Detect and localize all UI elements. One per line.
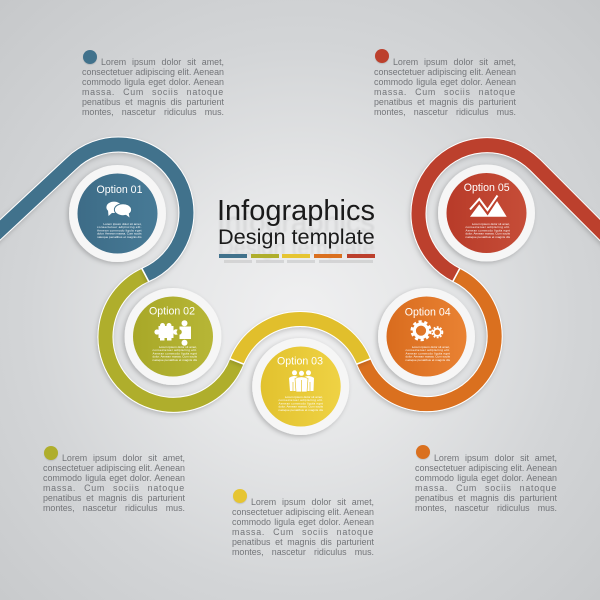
body text: dolor. Aenean massa. Cum sociis bbox=[466, 232, 510, 236]
body text: Aenean commodo ligula eget bbox=[97, 228, 142, 232]
text block: top right: massa. Cum sociis natoque bbox=[374, 87, 516, 97]
title block bbox=[217, 195, 375, 263]
colour key bars bbox=[219, 254, 375, 263]
track segment 1: blue bbox=[0, 145, 186, 275]
text block: top left: commodo ligula eget dolor. Aenean bbox=[82, 77, 224, 87]
text block: top right bbox=[374, 49, 516, 117]
text block: bottom left: montes, nascetur ridiculus mus. bbox=[43, 503, 185, 513]
text block: bottom centre: penatibus et magnis dis parturient bbox=[232, 537, 374, 547]
body text bbox=[466, 222, 510, 239]
icon: speech bubbles bbox=[106, 202, 132, 218]
text block: bottom left: consectetuer adipiscing elit. Aenean bbox=[43, 463, 185, 473]
body text: consectetuer adipiscing elit. bbox=[278, 398, 323, 402]
icon: people bbox=[289, 370, 314, 392]
body text: dolor. Aenean massa. Cum sociis bbox=[152, 355, 197, 359]
text block: bottom left: commodo ligula eget dolor. Aenean bbox=[43, 473, 185, 483]
text block: top left: penatibus et magnis dis parturient bbox=[82, 97, 224, 107]
body text: Lorem ipsum dolor sit amet, bbox=[159, 345, 197, 349]
title block: Infographics bbox=[217, 207, 375, 239]
body text: Aenean commodo ligula eget bbox=[278, 401, 323, 405]
body text: consectetuer adipiscing elit. bbox=[466, 225, 510, 229]
body text: consectetuer adipiscing elit. bbox=[406, 348, 450, 352]
text block: bottom right: massa. Cum sociis natoque bbox=[415, 483, 557, 493]
track segment 4: orange bbox=[364, 275, 495, 404]
text block: bottom right: commodo ligula eget dolor. Aenean bbox=[415, 473, 557, 483]
body text: dolor. Aenean massa. Cum sociis bbox=[97, 232, 142, 236]
body text: consectetuer adipiscing elit. bbox=[97, 225, 142, 229]
body text bbox=[97, 222, 142, 239]
body text: consectetuer adipiscing elit. bbox=[152, 348, 197, 352]
body text: natoque penatibus et magnis dis bbox=[466, 235, 510, 239]
text block: top right: montes, nascetur ridiculus mus. bbox=[374, 107, 516, 117]
text block: bottom centre: consectetuer adipiscing elit. Aenean bbox=[232, 507, 374, 517]
text block: bottom right bbox=[415, 445, 557, 513]
title: Infographics bbox=[217, 195, 375, 227]
body text: Aenean commodo ligula eget bbox=[152, 351, 197, 355]
text block: top right: consectetuer adipiscing elit. Aenean bbox=[374, 67, 516, 77]
text block: bottom right: montes, nascetur ridiculus mus. bbox=[415, 503, 557, 513]
text block: bottom centre: massa. Cum sociis natoque bbox=[232, 527, 374, 537]
text block: bottom left: penatibus et magnis dis parturient bbox=[43, 493, 185, 503]
text block: top right: commodo ligula eget dolor. Aenean bbox=[374, 77, 516, 87]
option 03 bbox=[252, 338, 349, 435]
text block: top left: Lorem ipsum dolor sit amet, bbox=[101, 57, 224, 67]
text block: top right: Lorem ipsum dolor sit amet, bbox=[393, 56, 516, 66]
body text: natoque penatibus et magnis dis bbox=[97, 235, 142, 239]
icon: mountain chart bbox=[470, 196, 507, 217]
text block: top left: consectetuer adipiscing elit. Aenean bbox=[82, 67, 224, 77]
option 03: Option 03 bbox=[277, 356, 323, 368]
option 05: Option 05 bbox=[464, 182, 510, 194]
text block: top right: penatibus et magnis dis parturient bbox=[374, 97, 516, 107]
body text: natoque penatibus et magnis dis bbox=[406, 358, 450, 362]
text block: bottom right: Lorem ipsum dolor sit amet, bbox=[434, 452, 557, 462]
option 04 bbox=[378, 288, 475, 385]
body text bbox=[406, 345, 450, 362]
text block: bottom centre: montes, nascetur ridiculus mus. bbox=[232, 547, 374, 557]
option 02 bbox=[124, 288, 222, 385]
option 04: Option 04 bbox=[405, 306, 451, 318]
track segment 5: red bbox=[418, 145, 600, 275]
body text: Aenean commodo ligula eget bbox=[466, 228, 510, 232]
ribbon track bbox=[0, 145, 600, 405]
body text bbox=[278, 395, 323, 412]
text block: bottom left bbox=[43, 446, 185, 513]
option 01: Option 01 bbox=[97, 184, 143, 196]
track segment 2: olive bbox=[105, 275, 237, 405]
option 02: Option 02 bbox=[149, 306, 195, 318]
icon: puzzle bbox=[154, 320, 191, 346]
text block: bottom left: Lorem ipsum dolor sit amet, bbox=[62, 453, 185, 463]
body text: Lorem ipsum dolor sit amet, bbox=[412, 345, 450, 349]
icon: gears bbox=[412, 322, 442, 340]
text block: top left bbox=[82, 50, 224, 117]
body text: Lorem ipsum dolor sit amet, bbox=[285, 395, 323, 399]
text block: bottom right: consectetuer adipiscing elit. Aenean bbox=[415, 463, 557, 473]
segment joints bbox=[142, 268, 460, 364]
option 05 bbox=[438, 164, 535, 262]
text block: bottom right: penatibus et magnis dis parturient bbox=[415, 493, 557, 503]
body text: Lorem ipsum dolor sit amet, bbox=[472, 222, 510, 226]
subtitle: Design template bbox=[218, 224, 375, 249]
text block: top left: massa. Cum sociis natoque bbox=[82, 87, 224, 97]
text block: bottom centre bbox=[232, 489, 374, 557]
body text: dolor. Aenean massa. Cum sociis bbox=[278, 405, 323, 409]
text block: bottom centre: commodo ligula eget dolor. Aenean bbox=[232, 517, 374, 527]
text block: bottom centre: Lorem ipsum dolor sit amet, bbox=[251, 496, 374, 506]
body text: dolor. Aenean massa. Cum sociis bbox=[406, 355, 450, 359]
body text: Aenean commodo ligula eget bbox=[406, 351, 450, 355]
text block: bottom left: massa. Cum sociis natoque bbox=[43, 483, 185, 493]
body text: Lorem ipsum dolor sit amet, bbox=[103, 222, 142, 226]
text block: top left: montes, nascetur ridiculus mus. bbox=[82, 107, 224, 117]
body text bbox=[152, 345, 197, 362]
track segment 3: yellow bbox=[237, 319, 364, 362]
body text: natoque penatibus et magnis dis bbox=[152, 358, 197, 362]
title block: Design template bbox=[218, 235, 375, 260]
body text: natoque penatibus et magnis dis bbox=[278, 408, 323, 412]
option 01 bbox=[69, 165, 166, 262]
